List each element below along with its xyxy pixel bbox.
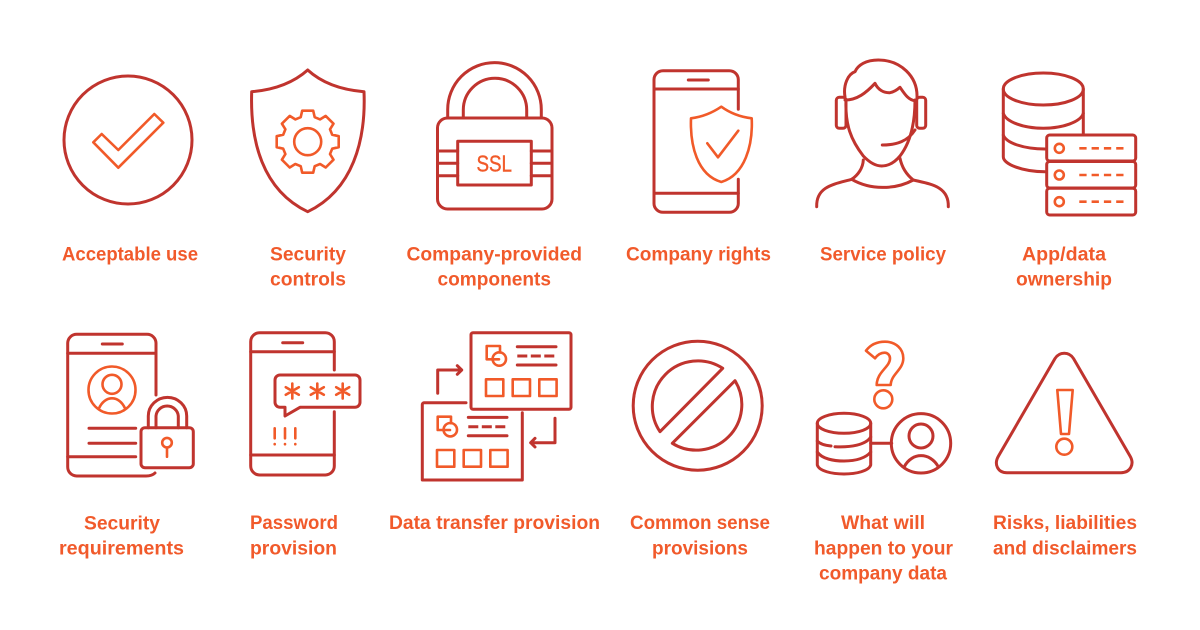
label: common sense provisions: Common sense bbox=[630, 512, 770, 534]
label: risks, liabilities and disclaimers bbox=[993, 512, 1137, 560]
icon: company data question mark, database and person bbox=[817, 342, 951, 474]
label: what will happen to your company data: company data bbox=[819, 562, 947, 584]
label: password provision: provision bbox=[250, 538, 337, 560]
icon: data transfer windows and arrows bbox=[422, 333, 571, 480]
label: company-provided components: Company-provided bbox=[406, 244, 582, 266]
label: password provision: Password bbox=[250, 512, 338, 534]
icon: security requirements phone with avatar and lock bbox=[68, 334, 193, 476]
icon: SSL padlock: SSL bbox=[476, 151, 512, 177]
label: data transfer provision: Data transfer provision bbox=[389, 512, 600, 534]
label: security controls bbox=[270, 244, 346, 291]
icon: risks warning triangle bbox=[996, 353, 1132, 473]
icon: security controls shield with gear bbox=[252, 70, 364, 212]
icon: SSL padlock bbox=[438, 63, 552, 209]
label: company rights: Company rights bbox=[626, 244, 771, 266]
label: company-provided components: components bbox=[438, 269, 551, 291]
icon: common sense prohibition sign bbox=[633, 341, 762, 470]
icon: service policy headset person bbox=[817, 60, 948, 207]
label: common sense provisions: provisions bbox=[652, 538, 748, 560]
icon: company rights phone with shield bbox=[654, 71, 752, 212]
label: what will happen to your company data: What will bbox=[841, 512, 925, 534]
label: what will happen to your company data bbox=[814, 512, 953, 584]
label: security requirements bbox=[59, 513, 184, 560]
icon: acceptable use check circle bbox=[64, 76, 192, 204]
label: app/data ownership bbox=[1016, 244, 1112, 291]
label: acceptable use: Acceptable use bbox=[62, 244, 198, 266]
label: common sense provisions bbox=[630, 512, 770, 560]
label: risks, liabilities and disclaimers: and disclaimers bbox=[993, 538, 1137, 560]
label: password provision bbox=[250, 512, 338, 560]
label: company-provided components bbox=[406, 244, 582, 291]
icon: password phone with speech bubble bbox=[251, 333, 360, 475]
label: security controls: controls bbox=[270, 269, 346, 291]
label: risks, liabilities and disclaimers: Risks, liabilities bbox=[993, 512, 1137, 534]
label: service policy: Service policy bbox=[820, 244, 946, 266]
label: security requirements: requirements bbox=[59, 538, 184, 560]
label: security requirements: Security bbox=[84, 513, 160, 535]
label: security controls: Security bbox=[270, 244, 346, 266]
label: app/data ownership: ownership bbox=[1016, 269, 1112, 291]
icon: app and data database with servers bbox=[1003, 73, 1136, 215]
label: app/data ownership: App/data bbox=[1022, 244, 1106, 266]
label: what will happen to your company data: happen to your bbox=[814, 538, 953, 560]
